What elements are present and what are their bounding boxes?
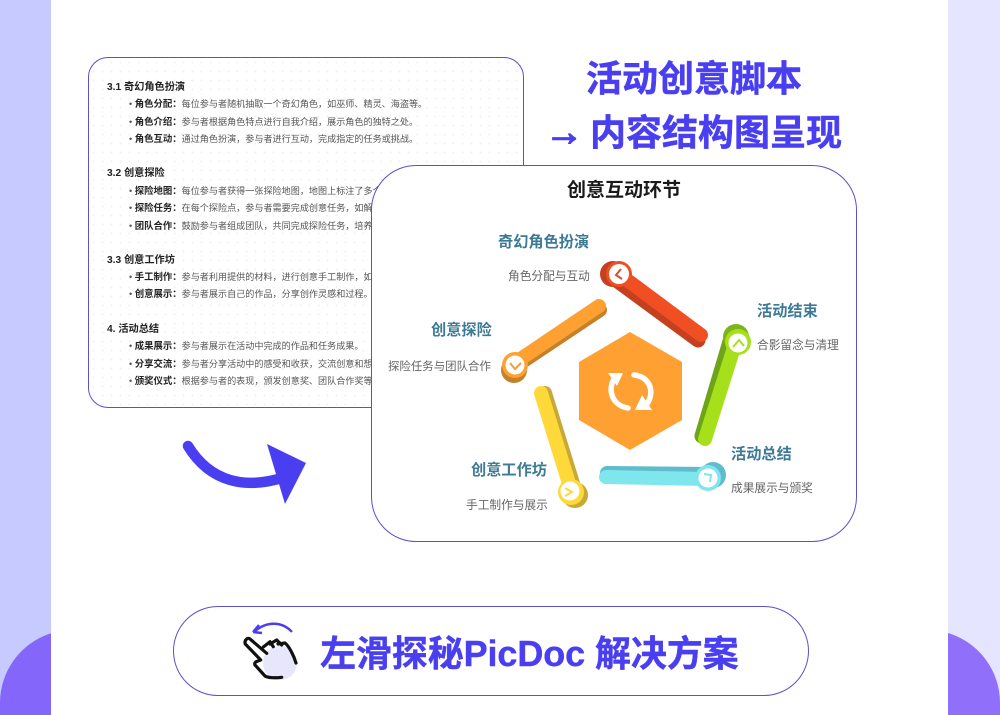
call to action pill: [173, 606, 809, 696]
segment: red: [600, 261, 701, 340]
segment: orange: [501, 306, 600, 383]
panel heading: 创意互动环节: [567, 180, 681, 201]
label: 创意工作坊: 创意工作坊: [471, 462, 547, 479]
segment: yellow: [541, 393, 588, 508]
heading: 4: 4. 活动总结: [107, 324, 159, 335]
title: 内容结构图呈现: [590, 112, 842, 153]
segment: green: [702, 324, 751, 439]
cycle diagram: [501, 261, 751, 508]
sublabel: 手工制作与展示: [466, 499, 548, 512]
title: 活动创意脚本: [586, 58, 802, 99]
item: • 角色分配：每位参与者随机抽取一个奇幻角色，如巫师、精灵、海盗等。: [129, 98, 427, 109]
item: • 手工制作：参与者利用提供的材料，进行创意手工制作，如绘画。: [129, 271, 400, 282]
item: • 创意展示：参与者展示自己的作品，分享创作灵感和过程。: [129, 288, 373, 299]
icon: central hexagon: [579, 332, 682, 450]
label: 奇幻角色扮演: 奇幻角色扮演: [498, 234, 589, 251]
item: • 角色互动：通过角色扮演，参与者进行互动，完成指定的任务或挑战。: [129, 133, 418, 144]
title: [545, 58, 842, 154]
call to action text: 左滑探秘PicDoc 解决方案: [320, 633, 739, 674]
sublabel: 合影留念与清理: [757, 339, 839, 352]
item: • 探险地图：每位参与者获得一张探险地图，地图上标注了多个探险点。: [129, 185, 418, 196]
label: 创意探险: 创意探险: [431, 322, 492, 339]
item: • 成果展示：参与者展示在活动中完成的作品和任务成果。: [129, 340, 364, 351]
panel: document outline: [88, 57, 524, 408]
sublabel: 探险任务与团队合作: [388, 361, 491, 373]
item: • 探险任务：在每个探险点，参与者需要完成创意任务，如解谜。: [129, 202, 391, 213]
document text: [107, 81, 427, 386]
segment: cyan: [606, 462, 726, 491]
icon: swipe hand: [243, 622, 298, 680]
sublabel: 角色分配与互动: [508, 270, 590, 283]
title: →: [545, 112, 583, 154]
item: • 分享交流：参与者分享活动中的感受和收获，交流创意和想法。: [129, 358, 391, 369]
panel: 创意互动环节: [371, 165, 857, 542]
item: • 团队合作：鼓励参与者组成团队，共同完成探险任务，培养协作。: [129, 220, 400, 231]
sublabel: 成果展示与颁奖: [731, 482, 813, 495]
item: • 角色介绍：参与者根据角色特点进行自我介绍，展示角色的独特之处。: [129, 116, 418, 127]
heading: 3.1: 3.1 奇幻角色扮演: [107, 82, 185, 93]
arrow: curved to the right: [182, 440, 306, 504]
label: 活动结束: 活动结束: [757, 303, 818, 320]
item: • 颁奖仪式：根据参与者的表现，颁发创意奖、团队合作奖等。: [129, 375, 382, 386]
heading: 3.2: 3.2 创意探险: [107, 168, 165, 179]
label: 活动总结: 活动总结: [731, 446, 792, 463]
heading: 3.3: 3.3 创意工作坊: [107, 255, 175, 266]
